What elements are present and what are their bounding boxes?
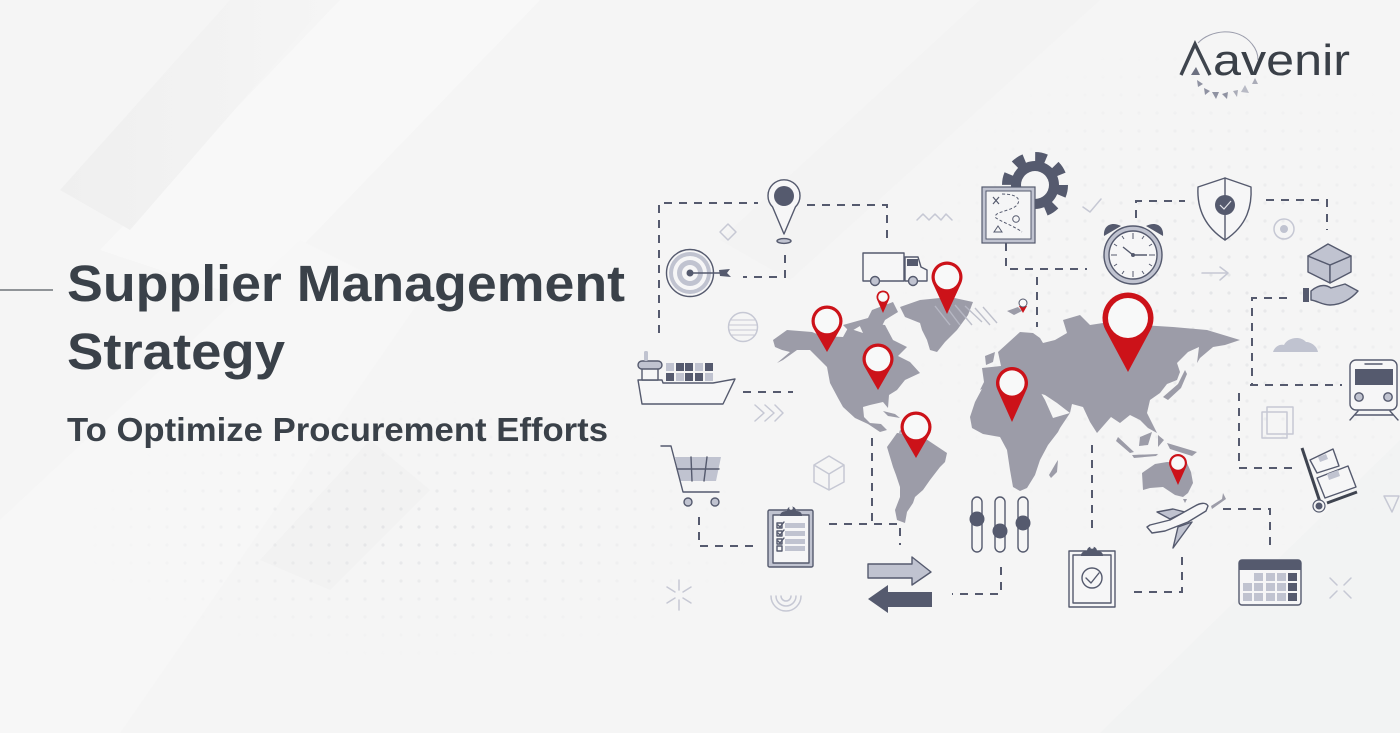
decorative small icons [667, 199, 1399, 611]
logo: Aavenir [1181, 32, 1350, 99]
icon: semicircle arcs [771, 596, 801, 611]
icon: strategy board [982, 187, 1035, 243]
world map [773, 297, 1240, 523]
map: uk and iceland [985, 307, 1022, 365]
icon: exchange arrows [868, 557, 932, 613]
icon: cloud [1273, 338, 1318, 352]
hatching over greenland [935, 305, 997, 325]
icon: location pin [768, 180, 800, 243]
icon: x burst [1330, 578, 1351, 598]
pin: africa [996, 367, 1028, 422]
icon: starburst [667, 580, 691, 610]
icon: train [1350, 360, 1398, 420]
icon: hand trolley [1302, 448, 1357, 512]
map: japan [1163, 370, 1187, 400]
icon: calendar [1239, 560, 1301, 605]
map: africa [970, 377, 1070, 491]
pin: arctic [876, 291, 889, 313]
icon: shopping cart [661, 446, 721, 506]
red map pins [812, 261, 1187, 485]
pin: russia [1102, 292, 1154, 372]
dashed connectors [659, 200, 1342, 594]
map: caribbean [883, 411, 905, 433]
icon: security shield [1198, 178, 1251, 240]
icon: sliders [970, 497, 1030, 552]
icon: inverted triangle [1384, 496, 1399, 512]
map: eurasia [980, 315, 1240, 433]
icon: box on hand [1303, 244, 1358, 305]
icon: delivery truck [863, 253, 927, 286]
map: new zealand and tasmania [1183, 493, 1226, 509]
left rule line [0, 289, 53, 291]
pin: greenland [932, 261, 962, 314]
map: australia [1142, 462, 1193, 497]
background [256, 166, 1356, 598]
pin: south america [900, 411, 932, 458]
title: Supplier Management [67, 255, 625, 312]
pin: iceland [1019, 299, 1027, 313]
pin: australia [1169, 454, 1187, 485]
map: canadian arctic [843, 302, 898, 332]
icon: thin arrow [1202, 267, 1228, 280]
icon: airplane [1147, 503, 1208, 548]
icon: strategy gear [1008, 158, 1062, 212]
icon: diamond [720, 224, 736, 240]
map: madagascar [1049, 460, 1058, 478]
icon: cargo ship [638, 351, 735, 404]
icon: chevrons [755, 405, 783, 421]
icon: overlapping squares [1262, 407, 1293, 438]
map: south america [887, 433, 947, 523]
logo: Aavenir: avenir [1213, 36, 1350, 85]
title: Strategy [67, 323, 286, 380]
icon: alarm clock [1104, 224, 1163, 284]
subtitle: To Optimize Procurement Efforts [67, 411, 608, 448]
icon: zigzag [917, 214, 952, 220]
pin: alaska [812, 305, 842, 352]
title [67, 255, 625, 380]
icon: checkmark [1083, 199, 1101, 212]
map: greenland [900, 297, 973, 352]
map: southeast asia islands [1116, 432, 1197, 458]
icon: approval clipboard [1069, 545, 1115, 607]
map: north america [773, 322, 920, 432]
icon: target and dart [666, 250, 731, 296]
pin: usa [862, 343, 893, 390]
icon: cube [814, 456, 844, 490]
icon: striped globe [728, 312, 758, 342]
icon: radar target [1274, 219, 1294, 239]
icon: checklist clipboard [768, 506, 813, 567]
